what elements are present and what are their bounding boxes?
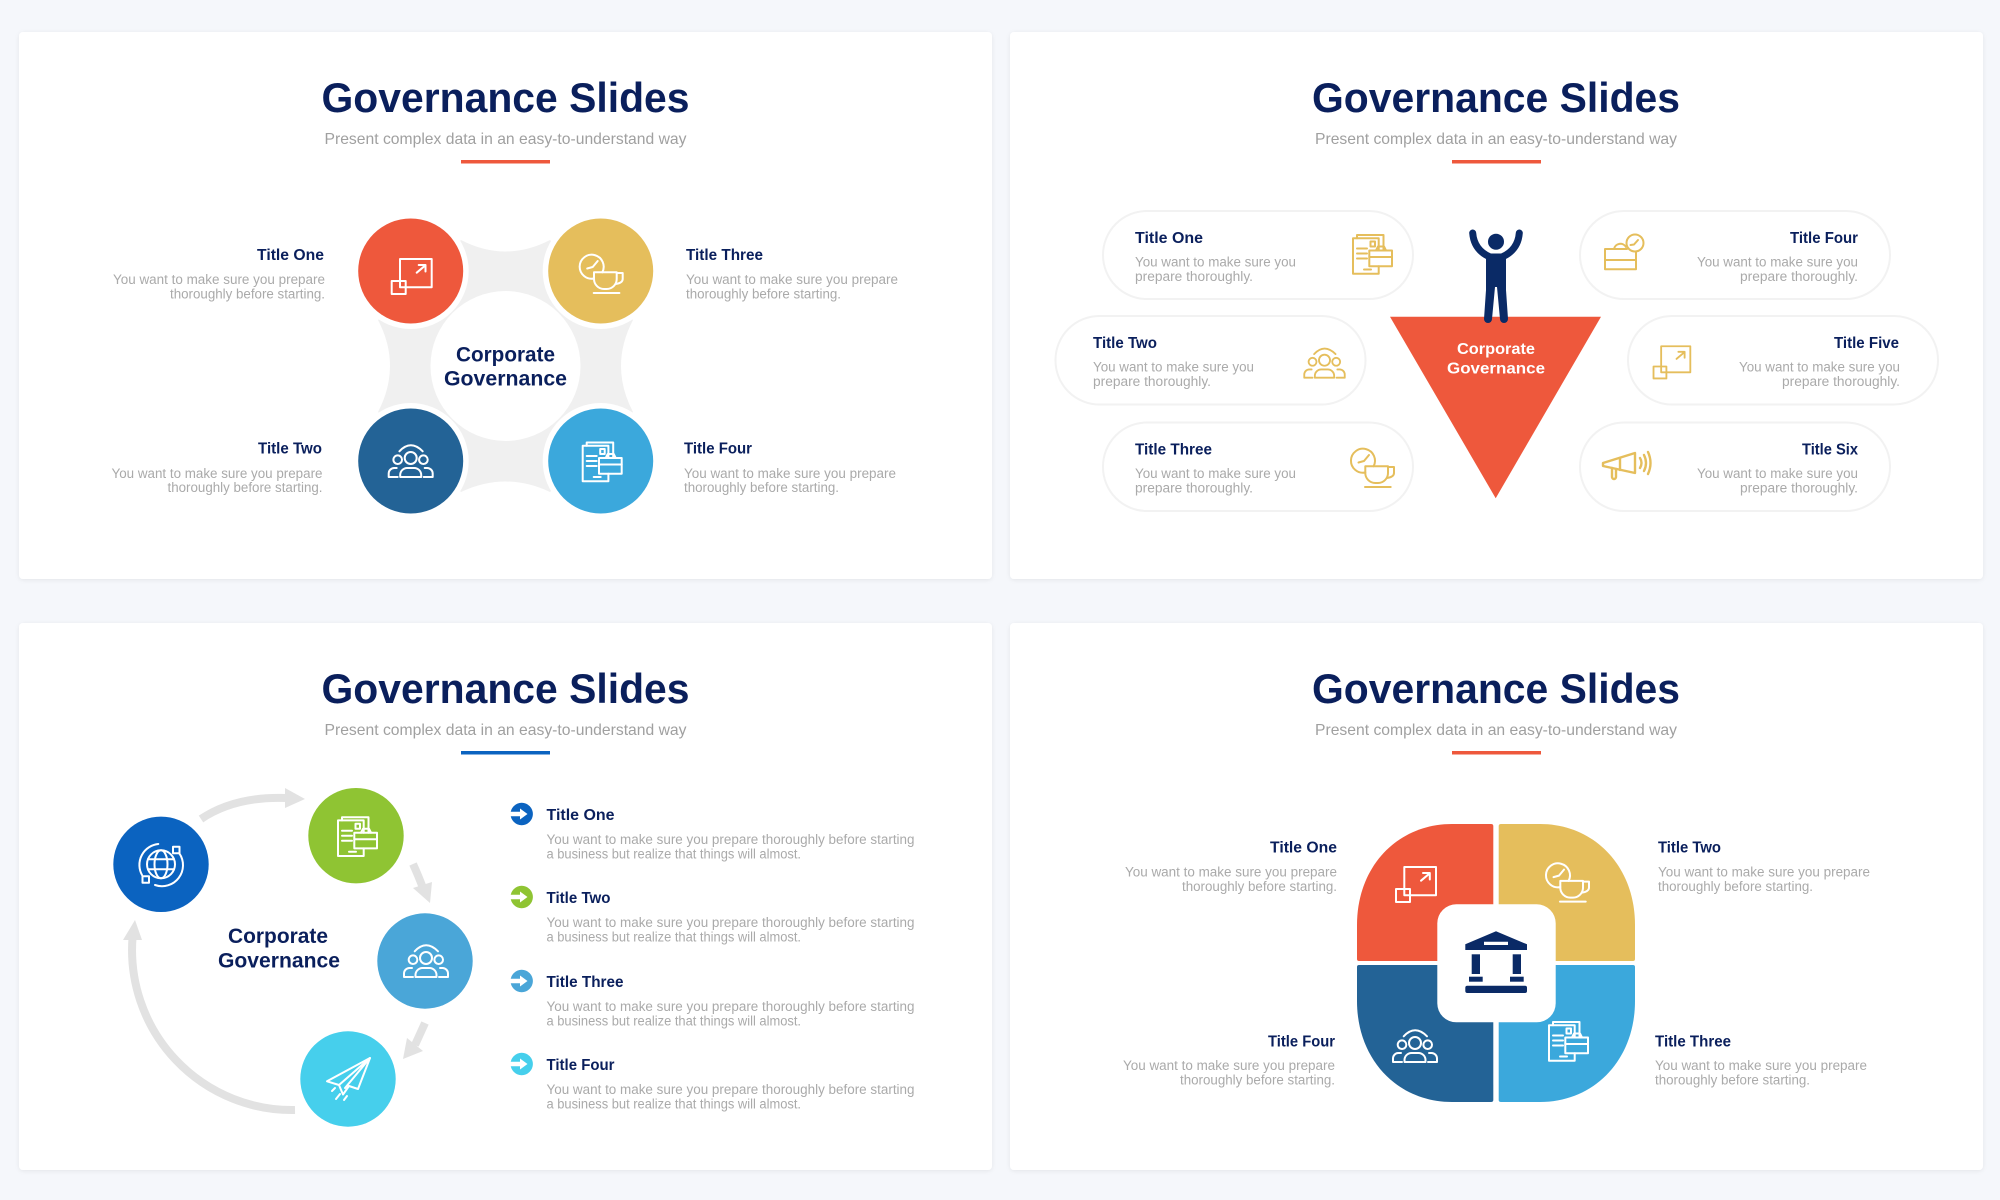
text: title four: You want to make sure you prepare: [1123, 1058, 1335, 1073]
icon: resize: [1396, 867, 1436, 902]
title: Governance Slides: [322, 665, 690, 712]
text: title two: [1658, 840, 1870, 894]
text: title two: [112, 440, 322, 495]
text: title three: You want to make sure you prepare: [1655, 1058, 1867, 1073]
title: Governance Slides: [322, 74, 690, 121]
centre label: Corporate: [228, 925, 328, 948]
pill: title five: [1628, 316, 1938, 404]
text: title one: You want to make sure you prepare: [1125, 864, 1337, 880]
circle: green document icon: [308, 788, 404, 883]
pill: title four: Title Four: [1790, 230, 1858, 247]
list item: title one: [510, 803, 914, 862]
pill: title three: prepare thoroughly.: [1135, 480, 1253, 496]
icon: arrow bullet: [510, 803, 533, 825]
circle: yellow cup icon: [543, 213, 659, 329]
pill: title one: [1103, 211, 1413, 299]
icon: arrow bullet: [510, 970, 533, 992]
pill: title six: prepare thoroughly.: [1740, 480, 1858, 496]
text: title one: Title One: [1270, 840, 1337, 856]
text: title three: Title Three: [1655, 1034, 1731, 1050]
centre label: [218, 925, 340, 972]
icon: person with raised arms: [1473, 233, 1519, 323]
icon: people: [1393, 1030, 1437, 1062]
list item: title one: Title One: [546, 807, 615, 824]
text: title two: You want to make sure you prepare: [1658, 864, 1870, 880]
accent bar: [461, 751, 550, 754]
centre white circle with label: [430, 291, 580, 441]
text: title one: You want to make sure you prepare: [113, 272, 325, 287]
text: title four: You want to make sure you prepare: [684, 466, 896, 481]
title: Governance Slides: [1312, 665, 1680, 712]
icon: arrow bullet: [510, 886, 533, 908]
icon: document and briefcase: [1549, 1022, 1588, 1061]
quadrant: dark blue: [1357, 965, 1493, 1102]
icon: bank building: [1465, 931, 1527, 993]
pill: title two: Title Two: [1093, 335, 1157, 352]
panel: circular process: [19, 623, 992, 1170]
panel: inverted triangle with six pills: [1010, 32, 1983, 579]
list item: title three: [510, 970, 914, 1028]
text: title four: [1123, 1034, 1335, 1088]
pill: title two: prepare thoroughly.: [1093, 374, 1211, 389]
pill: title two: You want to make sure you: [1093, 360, 1254, 374]
text: title two: Title Two: [1658, 840, 1721, 856]
quadrant: light blue: [1499, 965, 1635, 1102]
circle: cyan paper plane icon: [300, 1031, 396, 1127]
pill: title one: You want to make sure you: [1135, 254, 1296, 270]
pill: title three: You want to make sure you: [1135, 466, 1296, 481]
subtitle: Present complex data in an easy-to-understand way: [1315, 722, 1677, 739]
pill: title six: Title Six: [1802, 442, 1858, 458]
inverted triangle with label: [1390, 317, 1601, 498]
icon: arrow bullet: [510, 1053, 533, 1075]
centre label: Governance: [218, 950, 340, 972]
text: title three: thoroughly before starting.: [686, 286, 841, 302]
arrow: people to plane: [403, 1023, 425, 1059]
accent bar: [1452, 160, 1541, 164]
pill: title three: Title Three: [1135, 442, 1212, 458]
text: title one: [113, 247, 325, 302]
text: title two: thoroughly before starting.: [168, 480, 322, 495]
text: title four: thoroughly before starting.: [1180, 1072, 1335, 1088]
list item: title three: Title Three: [546, 974, 624, 991]
accent bar: [1452, 751, 1541, 754]
list item: title four: [510, 1053, 914, 1112]
pill: title one: prepare thoroughly.: [1135, 269, 1253, 284]
pill: title six: [1580, 422, 1890, 511]
text: title four: Title Four: [684, 440, 752, 458]
inverted triangle with label: Corporate: [1457, 341, 1535, 358]
inverted triangle with label: Governance: [1447, 360, 1545, 377]
pill: title four: prepare thoroughly.: [1740, 269, 1858, 284]
pill: title four: [1580, 211, 1890, 299]
pill: title six: You want to make sure you: [1697, 466, 1858, 481]
text: title three: [1655, 1034, 1867, 1088]
list item: title three: a business but realize that things will almost.: [546, 1014, 801, 1028]
text: title one: thoroughly before starting.: [1182, 879, 1337, 894]
circle: light blue document icon: [543, 403, 659, 519]
text: title three: [686, 247, 898, 302]
title: Governance Slides: [1312, 74, 1680, 121]
quadrant: red: [1357, 824, 1493, 961]
quadrant: yellow: [1499, 824, 1635, 961]
circle: blue people icon: [377, 913, 473, 1009]
circle: red resize icon: [353, 213, 469, 329]
panel: four-quadrant rounded shape: [1010, 623, 1983, 1170]
list item: title four: Title Four: [546, 1057, 614, 1074]
text: title one: Title One: [257, 247, 324, 264]
arrow: plane back to globe: [123, 920, 295, 1110]
circle: dark blue people icon: [353, 403, 469, 519]
list item: title one: You want to make sure you prepare thoroughly before starting: [546, 832, 914, 847]
text: title one: [1125, 840, 1337, 894]
text: title two: Title Two: [258, 440, 322, 458]
subtitle: Present complex data in an easy-to-understand way: [1315, 131, 1677, 148]
pill: title one: Title One: [1135, 230, 1203, 247]
list item: title two: a business but realize that things will almost.: [546, 930, 801, 944]
subtitle: Present complex data in an easy-to-understand way: [324, 722, 686, 739]
list item: title two: Title Two: [546, 890, 611, 907]
list item: title one: a business but realize that things will almost.: [546, 846, 801, 862]
text: title four: Title Four: [1268, 1034, 1335, 1050]
list item: title four: a business but realize that things will almost.: [546, 1096, 801, 1112]
list item: title two: You want to make sure you prepare thoroughly before starting: [546, 915, 914, 930]
accent bar: [461, 160, 550, 164]
pill: title four: You want to make sure you: [1697, 254, 1858, 270]
text: title two: You want to make sure you prepare: [112, 466, 322, 481]
text: title four: [684, 440, 896, 495]
text: title three: thoroughly before starting.: [1655, 1072, 1810, 1088]
text: title three: Title Three: [686, 247, 763, 264]
list item: title three: You want to make sure you prepare thoroughly before starting: [546, 999, 914, 1014]
pill: title five: You want to make sure you: [1739, 360, 1900, 374]
pill: title five: prepare thoroughly.: [1782, 374, 1900, 389]
text: title two: thoroughly before starting.: [1658, 879, 1813, 894]
text: title three: You want to make sure you prepare: [686, 272, 898, 287]
pill: title two: [1056, 316, 1366, 404]
pill: title three: [1103, 422, 1413, 511]
text: title four: thoroughly before starting.: [684, 480, 839, 495]
arrow: document to people: [413, 864, 432, 903]
circle: blue globe icon: [113, 817, 209, 912]
centre white circle with label: Governance: [444, 368, 567, 390]
centre white rounded square: [1437, 904, 1556, 1022]
panel: four circles around corporate governance: [19, 32, 992, 579]
arrow: globe to document: [201, 788, 305, 819]
subtitle: Present complex data in an easy-to-understand way: [324, 131, 686, 148]
centre white circle with label: Corporate: [456, 344, 555, 366]
list item: title two: [510, 886, 914, 944]
icon: cup and clock: [1546, 863, 1589, 902]
pill: title five: Title Five: [1834, 335, 1899, 352]
list item: title four: You want to make sure you prepare thoroughly before starting: [546, 1082, 914, 1097]
text: title one: thoroughly before starting.: [170, 286, 325, 302]
grey connector shape: [378, 240, 633, 492]
